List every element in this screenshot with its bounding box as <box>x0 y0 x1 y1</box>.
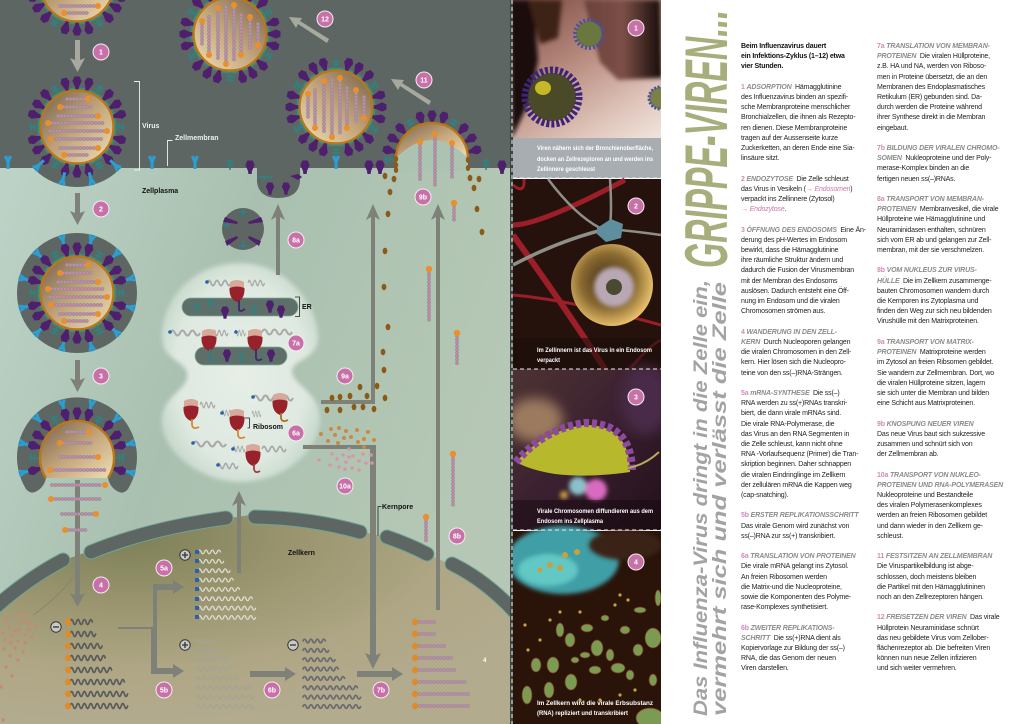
text column 2: flächenrezeptor ab. Die befreiten Viren <box>877 645 990 652</box>
text column 1: 5a mRNA-SYNTHESE Die ss(–) <box>741 390 840 397</box>
text column 1: die Zelle schleust, kann nicht ohne <box>741 441 842 448</box>
step badges: 8b <box>453 534 461 540</box>
text column 1: Chromosomen strömen aus. <box>741 308 825 315</box>
nucleus <box>0 515 510 724</box>
photo badges: 4 <box>634 560 638 566</box>
text column 1: 1 ADSORPTION Hämagglutinine <box>741 84 841 91</box>
receptor cluster <box>597 219 623 242</box>
text column 2: membran, mit der sie verschmelzen. <box>877 247 984 254</box>
text column 2: 8b VOM NUKLEUS ZUR VIRUS- <box>877 267 977 274</box>
step badges: 11 <box>420 78 428 84</box>
extracellular space <box>0 0 510 170</box>
text column 2: bauten Chromosomen wandern durch <box>877 288 989 295</box>
chromosome cluster <box>560 477 607 501</box>
text column 1: des Influenzavirus binden an spezifi- <box>741 94 848 101</box>
text column 1: SCHRITT Die ss(+)RNA dient als <box>741 635 841 642</box>
caption 3 <box>537 508 653 525</box>
thin trace line <box>33 578 73 615</box>
ER tubes <box>182 298 298 365</box>
text column 1: Die virale RNA-Polymerase, die <box>741 421 834 428</box>
text column 1: 2 ENDOZYTOSE Die Zelle schleust <box>741 176 849 183</box>
text column 2: die Partikel mit den Hämagglutininen <box>877 584 985 591</box>
text column 1: das Virus in Vesikeln (→ Endosomen) <box>741 186 852 193</box>
text column 2: die viralen Hüllproteine sitzen, lagern <box>877 380 985 387</box>
text column 2: 12 FREISETZEN DER VIREN Das virale <box>877 614 999 621</box>
text column 2: sie sich unter die Membran und bilden <box>877 390 989 397</box>
text column 2: 10a TRANSPORT VON NUKLEO- <box>877 472 981 479</box>
text column 2: PROTEINEN UND RNA-POLYMERASEN <box>877 482 1003 489</box>
caption band 2 <box>581 338 661 369</box>
polymerase particles 10a <box>317 447 374 472</box>
photo 3: chromosomes diffusing <box>507 366 669 530</box>
dark callout brackets <box>245 297 382 536</box>
text column 1: bewirkt, dass die Hämagglutinine <box>741 247 838 254</box>
step badges: 5a <box>160 566 168 572</box>
budding virus 9b <box>382 110 482 188</box>
arrow 4 <box>70 480 85 607</box>
text column 1: 5b ERSTER REPLIKATIONSSCHRITT <box>741 512 858 519</box>
text column 2: Sie wandern zur Zellmembran. Dort, wo <box>877 370 994 376</box>
photo 4: nucleus with viral RNA <box>507 526 664 724</box>
arrow 9a <box>321 204 380 404</box>
text column 2: PROTEINEN Matrixproteine werden <box>877 349 986 356</box>
mRNA strands <box>168 280 293 468</box>
text column 1: 6a TRANSLATION VON PROTEINEN <box>741 553 856 560</box>
caption 3: Virale Chromosomen diffundieren aus dem <box>537 508 653 515</box>
text column 2: Das neue Virus baut sich sukzessive <box>877 431 985 438</box>
arrows <box>70 17 445 681</box>
step badges: 6b <box>268 688 276 694</box>
text column 1: Die virale mRNA gelangt ins Zytosol. <box>741 563 848 570</box>
text column 2: 7a TRANSLATION VON MEMBRAN- <box>877 43 990 50</box>
arrow 5 branch <box>118 580 184 678</box>
text column 2: eingebaut. <box>877 125 908 132</box>
yellow viral dome <box>516 423 659 476</box>
viral chromosomes leaving endosome <box>47 429 108 533</box>
text column 2: fertigen neuen ss(–)RNAs. <box>877 176 955 183</box>
membrane receptors and spikes <box>5 156 507 174</box>
text column 2: können nun neue Zellen infizieren <box>877 655 976 662</box>
RNA set 4 negative strand <box>65 619 128 709</box>
virus 1 docking <box>27 76 127 186</box>
text column 2: der Zellmembran ab. <box>877 451 938 458</box>
text column 1: vier Stunden. <box>741 63 783 70</box>
text column 1: tragen auf der Aussenseite kurze <box>741 135 838 142</box>
photo badges: 2 <box>634 204 638 210</box>
step badges: 9b <box>419 194 427 202</box>
text column 2: men in Proteine übersetzt, die an den <box>877 74 987 81</box>
text column 1: linsäure sitzt. <box>741 155 779 162</box>
text column 2: Hüllprotein Neuraminidase schnürt <box>877 625 979 632</box>
endosome sphere <box>571 244 653 326</box>
photo 2: virus in endosome <box>513 179 661 369</box>
text column 2 <box>877 43 1004 672</box>
RNA set 6b negative strand <box>303 639 361 708</box>
subtitle line 1: Das Influenza-Virus dringt in die Zelle ein, <box>691 280 712 716</box>
text column 2: merase-Komplex binden an die <box>877 165 969 172</box>
caption 2 <box>537 347 652 364</box>
caption 4: Im Zellkern wird die virale Erbsubstanz <box>537 700 653 707</box>
text column 2: 7b BILDUNG DER VIRALEN CHROMO- <box>877 145 999 152</box>
text column 2: PROTEINEN Die viralen Hüllproteine, <box>877 53 990 60</box>
photo 1: viruses approaching bronchial surface <box>510 0 671 178</box>
step badges: 9a <box>341 374 349 380</box>
text column 1: ihre räumliche Struktur ändern und <box>741 257 843 264</box>
step badges: 4 <box>99 582 103 590</box>
photo badges: 3 <box>634 394 638 402</box>
vesicle fused with membrane <box>257 166 302 198</box>
text column 2: Membranen des Endoplasmatisches <box>877 84 985 91</box>
text column 1: ren dienen. Diese Membranproteine <box>741 125 847 132</box>
text column 2: werden an freien Ribosomen gebildet <box>877 512 987 519</box>
caption 4: (RNA) repliziert und transkribiert <box>537 710 628 717</box>
RNA set 5b positive strand <box>196 639 254 708</box>
text column 1: skription beginnen. Daher schnappen <box>741 461 851 468</box>
diagram labels: Zellmembran <box>175 135 219 142</box>
endoplasmic reticulum zone <box>162 263 320 482</box>
text column 1: Beim Influenzavirus dauert <box>741 43 826 50</box>
text column 2: und dann wieder in den Zellkern ge- <box>877 523 983 530</box>
text column 2: sich vom ER ab und gelangen zur Zell- <box>877 237 991 244</box>
text column 2: 9b KNOSPUNG NEUER VIREN <box>877 421 973 428</box>
text column 2: 9a TRANSPORT VON MATRIX- <box>877 339 974 346</box>
caption 2: Im Zellinnern ist das Virus in ein Endosom <box>537 347 652 354</box>
diagram labels: ER <box>302 304 312 311</box>
virus 0 approaching <box>27 0 127 36</box>
text column 2: schlossen, doch meistens bleiben <box>877 574 976 581</box>
text column 2: 8a TRANSPORT VON MEMBRAN- <box>877 196 984 203</box>
photo badges <box>628 20 644 570</box>
diagram labels: Zellplasma <box>142 188 178 195</box>
text column 1: der zellulären mRNA die Kappen weg <box>741 482 852 489</box>
caption 1: Zellinnere geschleust <box>537 166 595 173</box>
text column 2: die Kernporen ins Zytoplasma und <box>877 298 978 305</box>
step badges: 10a <box>339 484 351 490</box>
text column 1: mit der Membran des Endosoms <box>741 278 837 285</box>
arrow 11 <box>391 79 431 105</box>
caption 1: docken an Zellrezeptoren an und werden ins <box>537 156 653 163</box>
text column 1: die viralen Chromosomen in den Zell- <box>741 349 851 356</box>
text column 2: Hüllproteine wie Hämagglutinine und <box>877 216 985 223</box>
subtitle line 2: vermehrt sich und verlässt die Zelle <box>710 281 731 716</box>
virus ball small <box>575 20 603 48</box>
text column 1: biert, die dann virale mRNAs sind. <box>741 410 841 417</box>
arrow 8b <box>431 204 445 610</box>
text column 1: die viralen Eindringlinge im Zellkern <box>741 472 845 479</box>
text column 1: derung des pH-Wertes im Endosom <box>741 237 847 244</box>
diagram labels: Kernpore <box>382 504 413 511</box>
nuclear membrane segments <box>0 517 515 612</box>
endosome fusion dip at membrane <box>17 67 137 187</box>
virus 3 opening endosome <box>17 397 137 493</box>
free chromosomes in cytoplasm <box>423 200 460 541</box>
text column 2: Retikulum (ER) gebunden sind. Da- <box>877 94 982 101</box>
text column 1: Das virale Genom wird zunächst von <box>741 523 849 530</box>
caption 1: Viren nähern sich der Bronchienoberfläche, <box>537 145 653 152</box>
step badges <box>93 11 465 698</box>
text column 1: 6b ZWEITER REPLIKATIONS- <box>741 625 834 632</box>
arrow 1 <box>70 40 85 72</box>
text column 2: durch werden die Proteine während <box>877 104 982 111</box>
step badges: 5b <box>160 688 168 694</box>
text column 2: das neu gebildete Virus vom Zellober- <box>877 635 988 642</box>
caption 3: Endosom ins Zellplasma <box>537 518 603 525</box>
text column 2: 11 FESTSITZEN AN ZELLMEMBRAN <box>877 553 992 560</box>
step badges: 2 <box>99 206 103 214</box>
step badges: 3 <box>99 374 103 380</box>
text column 1: nung im Endosom und die viralen <box>741 298 840 305</box>
arrow 12 <box>289 17 329 43</box>
dashed photo separators <box>512 0 661 724</box>
plus and minus signs <box>51 550 298 650</box>
step badges: 12 <box>321 16 329 24</box>
text column 1: 3 ÖFFNUNG DES ENDOSOMS Eine Än- <box>741 227 866 234</box>
text column 1: kern. Hier lösen sich die Nucleopro- <box>741 359 846 366</box>
virus 12 released <box>180 0 280 84</box>
text column 1: Viren darstellen. <box>741 665 789 672</box>
green RNA ovals <box>522 590 664 724</box>
text column 2: Neuraminidasen enthalten, schnüren <box>877 227 986 234</box>
caption 2: verpackt <box>537 357 560 364</box>
text column 2: PROTEINEN Membranvesikel, die virale <box>877 206 998 213</box>
text column 2: schleust. <box>877 533 903 540</box>
text column 1: rase-Komplexes synthetisiert. <box>741 604 828 611</box>
new chromosomes 7b <box>412 619 471 709</box>
text column 1: KERN Durch Nucleoporen gelangen <box>741 339 850 346</box>
arrow 3 <box>70 360 85 392</box>
text column 2: im Zytosol an freien Ribsomen gebildet. <box>877 359 993 366</box>
vesicle 8a <box>222 208 264 250</box>
text column 2: Die Viruspartikelbildung ist abge- <box>877 563 973 570</box>
text column 1: sche Membranproteine menschlicher <box>741 104 850 111</box>
text column 1: Zuckerketten, an deren Ende eine Sia- <box>741 145 855 152</box>
step badges: 7a <box>292 340 300 348</box>
text column 1: (cap-snatching). <box>741 492 788 499</box>
text column 1: RNA werden zu ss(+)RNAs transkri- <box>741 400 847 407</box>
text column 1: Kopiervorlage zur Bildung der ss(–) <box>741 645 845 652</box>
text column 2: eine Schicht aus Matrixproteinen. <box>877 400 975 407</box>
arrow 6b <box>250 667 296 681</box>
arrow 8a <box>271 204 285 275</box>
arrow 2 <box>70 193 85 225</box>
diagram labels: Ribosom <box>253 424 283 431</box>
text column 1: die Matrix-und die Nucleoproteine, <box>741 584 842 591</box>
text column 1: das Virus an den RNA Segmenten in <box>741 431 849 438</box>
RNA set 5a with cap <box>195 550 256 619</box>
text column 2: ihrer Synthese direkt in die Membran <box>877 114 985 121</box>
diagram labels: Zellkern <box>288 550 315 557</box>
caption band 1 <box>513 138 661 178</box>
dots in nucleus <box>0 612 38 722</box>
text column 1 <box>741 42 866 672</box>
step badges: 7b <box>377 688 385 694</box>
virus 11 attached <box>286 57 386 157</box>
yellow dots <box>523 549 637 702</box>
callout brackets <box>134 82 172 170</box>
virus ball large <box>525 70 579 124</box>
text column 2: Nukleoproteine und Bestandteile <box>877 492 973 499</box>
text column 1: auslösen. Dadurch entsteht eine Öff- <box>741 288 849 295</box>
text column 2: noch an den Zellrezeptoren hängen. <box>877 594 984 601</box>
matrix protein particles <box>325 156 484 413</box>
text column 1: verpackt ins Zellinnere (Zytosol) <box>741 196 835 203</box>
caption 4 <box>537 700 653 717</box>
text column 2: Virushülle mit den Matrixproteinen. <box>877 318 979 325</box>
photo badges: 1 <box>634 26 638 32</box>
caption 1 <box>537 145 653 173</box>
ribosomes <box>183 280 288 472</box>
text column 1: ein Infektions-Zyklus (1–12) etwa <box>741 53 845 60</box>
text column 1: sowie die Komponenten des Polyme- <box>741 594 851 601</box>
arrow 7b <box>357 667 403 681</box>
text column 2: finden den Weg zur sich neu bildenden <box>877 308 992 315</box>
text column 1: RNA -Vorlaufsequenz (Primer) die Tran- <box>741 451 858 458</box>
diagram labels <box>142 123 413 557</box>
text column 1: teine von den ss(–)RNA-Strängen. <box>741 370 843 376</box>
text column 1: → Endozytose. <box>741 206 786 213</box>
nucleoprotein particles 10a <box>319 426 376 449</box>
arrow to ribosomes <box>232 491 246 573</box>
text column 2: des viralen Polymerasenkomplexes <box>877 502 982 509</box>
text column 2: SOMEN Nukleoproteine und der Poly- <box>877 155 991 162</box>
panel: infection cycle diagram <box>0 0 515 724</box>
text column 2: und sich weiter vermehren. <box>877 665 957 672</box>
text column 1: An freien Ribosomen werden <box>741 574 827 581</box>
text column 2: z.B. HA und NA, werden von Riboso- <box>877 63 986 70</box>
step badges: 6a <box>292 430 300 438</box>
caption band 3 <box>513 500 661 530</box>
text column 1: RNA, die das Genom der neuen <box>741 655 836 662</box>
page number: 4 <box>483 658 487 664</box>
step badges: 8a <box>292 238 300 244</box>
text column 1: ss(–)RNA zur ss(+) transkribiert. <box>741 533 835 540</box>
text column 1: dadurch die Fusion der Virusmembran <box>741 267 854 274</box>
text column 2: zusammen und schnürt sich von <box>877 441 972 448</box>
panel edge <box>510 0 513 724</box>
virus ball right <box>648 86 661 110</box>
text column 1: 4 WANDERUNG IN DEN ZELL- <box>741 329 837 336</box>
diagram labels: Virus <box>142 123 159 130</box>
ER membrane proteins <box>193 299 285 363</box>
virus 2 in endosome <box>17 233 137 353</box>
step badges: 1 <box>99 50 103 56</box>
text column 1: Bronchialzellen, die ihnen als Rezepto- <box>741 114 855 121</box>
cytoplasm <box>0 168 510 724</box>
text column 2: HÜLLE Die im Zellkern zusammenge- <box>877 278 991 285</box>
arrow 10a <box>303 445 381 669</box>
